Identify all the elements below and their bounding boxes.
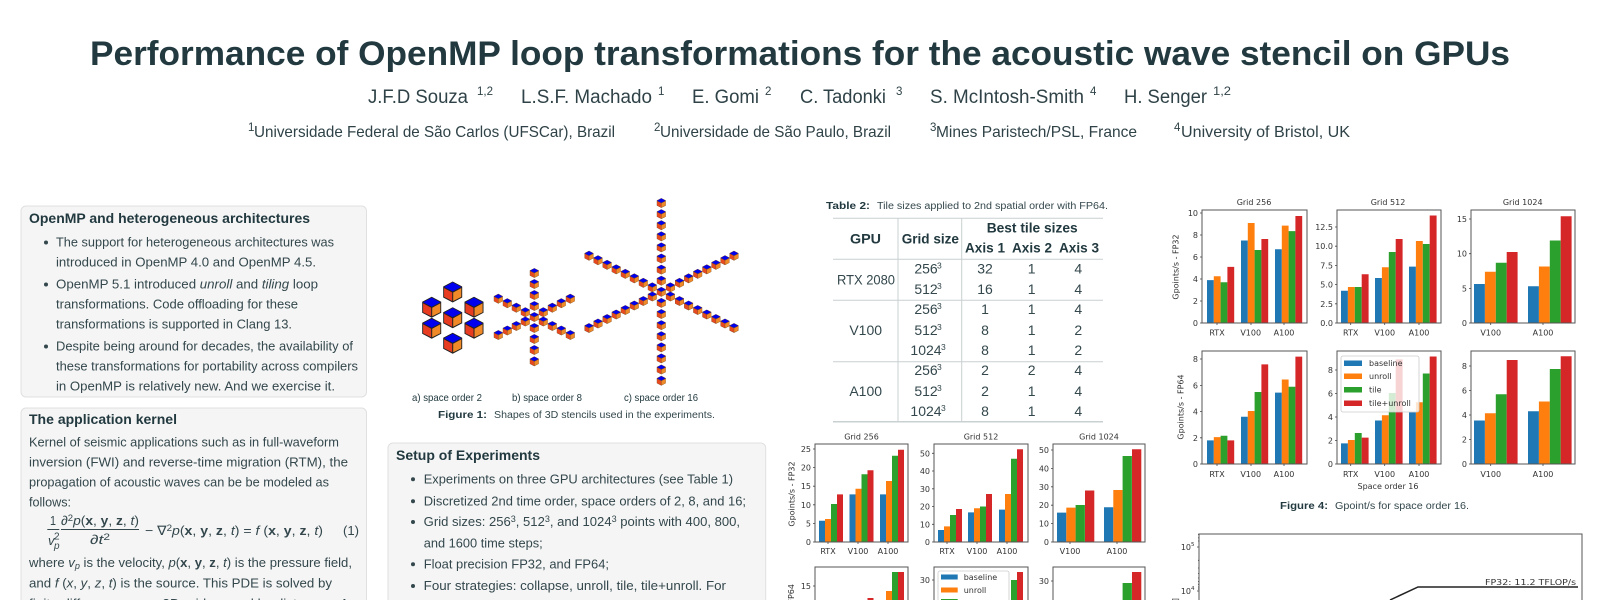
bullet list: Experiments on three GPU architectures (see Table 1) — [424, 471, 733, 486]
kernel explanation text — [28, 555, 352, 600]
bullet list: , and 1024 — [550, 514, 612, 529]
chart: Grid 512 FP64 with legend: 2 — [1328, 436, 1333, 446]
chart: Grid 1024 FP32: 0 — [1462, 319, 1467, 328]
authors: S. McIntosh-Smith — [930, 87, 1084, 108]
chart: Grid 512 FP32: 20 — [920, 502, 930, 512]
chart: Grid 1024 FP32: 5 — [1462, 284, 1467, 293]
table body: 3 — [937, 362, 942, 372]
chart: Grid 256 FP32: A100 — [1274, 329, 1294, 338]
authors: L.S.F. Machado — [521, 87, 652, 108]
table body: 2 — [1074, 322, 1082, 338]
bullet list: Float precision FP32, and FP64; — [424, 556, 609, 571]
table body: 1 — [1028, 403, 1036, 419]
chart: Grid 256 FP32: RTX — [1209, 329, 1225, 338]
table body: 1024 — [910, 342, 942, 358]
chart: Grid 1024 FP64: 2 — [1462, 436, 1467, 444]
chart: Grid 512 FP32: 30 — [920, 485, 930, 494]
chart: Grid 512 FP64 with legend: Space order 16 — [1358, 482, 1418, 491]
affiliations: Universidade Federal de São Carlos (UFSCar), Brazil — [254, 124, 615, 141]
bullet text: introduced in OpenMP 4.0 and OpenMP 4.5. — [56, 255, 316, 270]
table body: 3 — [937, 322, 942, 332]
table 2: tile sizes — [826, 201, 1108, 422]
table body: 3 — [937, 281, 942, 291]
equation: p — [171, 523, 180, 538]
equation: (1) — [343, 523, 359, 538]
chart: Grid 256 FP64: 15 — [801, 582, 811, 591]
chart: Grid 512 FP32: RTX — [1343, 329, 1359, 338]
chart: Grid 256 FP32 — [788, 433, 908, 556]
authors: E. Gomi — [692, 87, 759, 108]
table body: 1 — [981, 301, 989, 317]
chart: Grid 256 FP64: V100 — [1240, 470, 1261, 479]
bullet text: OpenMP 5.1 introduced unroll and tiling loop — [56, 277, 318, 292]
chart: Grid 512 FP32: V100 — [1374, 329, 1395, 338]
chart: Grid 1024 FP64 — [1462, 351, 1575, 479]
chart: Grid 256 FP64 — [787, 567, 908, 600]
chart: Grid 256 FP64: RTX — [1209, 470, 1225, 479]
table body: 256 — [914, 260, 938, 276]
chart: Grid 256 FP32: 5 — [806, 519, 811, 528]
authors: 1,2 — [477, 86, 493, 98]
chart: Grid 256 FP64 — [1176, 351, 1307, 479]
chart: log-scale FLOP performance: 5 — [1191, 542, 1195, 548]
table body: 16 — [977, 281, 993, 297]
affiliations: 1 — [248, 122, 254, 134]
chart: log-scale FLOP performance: 4 — [1191, 586, 1195, 592]
chart: Grid 512 FP64 with legend: 30 — [920, 576, 930, 585]
legend: unroll — [964, 586, 986, 595]
chart: Grid 256 FP32: V100 — [848, 547, 868, 556]
equation: 2 — [68, 513, 73, 523]
chart: Grid 512 FP32: 7.5 — [1320, 261, 1333, 270]
bullet text: these transformations for portability across compilers — [56, 359, 358, 374]
table body: 512 — [914, 281, 938, 297]
table body: 4 — [1074, 383, 1082, 399]
chart: Grid 512 FP64 with legend: 4 — [1328, 413, 1333, 422]
chart: Grid 512 FP32: 12.5 — [1315, 223, 1333, 232]
table body: 2 — [1028, 362, 1036, 378]
table body: 256 — [914, 301, 938, 317]
chart: Grid 1024 FP32: V100 — [1060, 547, 1080, 556]
chart: Grid 256 FP32: Grid 256 — [1237, 198, 1271, 207]
panel: OpenMP and heterogeneous architectures — [21, 206, 366, 397]
legend: unroll — [1369, 372, 1392, 381]
chart: Grid 1024 FP64: V100 — [1480, 470, 1501, 479]
table body: 3 — [941, 342, 946, 352]
chart: Grid 512 FP64 with legend — [920, 567, 1028, 600]
chart: Grid 1024 FP32: 0 — [1044, 538, 1049, 547]
kernel explanation text: p — [74, 561, 80, 571]
bullet list: Four strategies: collapse, unroll, tile, tile+unroll. For — [424, 578, 727, 593]
kernel explanation text: where v — [29, 555, 75, 570]
chart: Grid 1024 FP64: 30 — [1039, 577, 1049, 586]
figure 1: 3D stencils — [412, 198, 738, 421]
chart: Grid 256 FP32: RTX — [820, 547, 836, 556]
chart: log-scale FLOP performance: 10 — [1181, 587, 1191, 596]
affiliations — [248, 122, 1350, 141]
table body: A100 — [849, 383, 882, 399]
bullet list — [411, 471, 746, 600]
chart: Grid 1024 FP32: A100 — [1107, 547, 1127, 556]
figure 1 caption: Shapes of 3D stencils used in the experiments. — [494, 410, 715, 421]
heading: Setup of Experiments — [396, 448, 540, 463]
bullet list: , 512 — [516, 514, 545, 529]
chart: Grid 256 FP32: Grid 256 — [844, 433, 879, 442]
chart: Grid 512 FP32: 5.0 — [1320, 281, 1333, 290]
affiliations: 2 — [654, 122, 660, 134]
chart: Grid 512 FP32: 10.0 — [1315, 242, 1333, 251]
legend — [938, 571, 1009, 600]
affiliations: 3 — [930, 122, 936, 134]
affiliations: University of Bristol, UK — [1181, 124, 1350, 141]
chart: Grid 256 FP32: 2 — [1193, 297, 1198, 306]
chart: Grid 256 FP32: 15 — [801, 482, 811, 491]
table header — [850, 220, 1099, 256]
figure 1 caption: Figure 1: — [438, 410, 487, 421]
chart: log-scale FLOP performance — [1171, 534, 1582, 600]
authors: 1 — [658, 86, 664, 98]
bullet list: Discretized 2nd time order, space orders of 2, 8, and 16; — [424, 493, 746, 508]
table body: 4 — [1074, 260, 1082, 276]
equation: (x, y, z, t) — [81, 513, 139, 528]
chart: Grid 1024 FP32: 20 — [1039, 501, 1049, 510]
equation — [47, 513, 359, 552]
authors: H. Senger — [1124, 87, 1208, 108]
chart: Grid 1024 FP32: Grid 1024 — [1503, 198, 1543, 207]
authors: J.F.D Souza — [368, 87, 468, 108]
chart: Grid 1024 FP32: A100 — [1533, 329, 1553, 338]
table body: 4 — [1074, 362, 1082, 378]
table body: 2 — [1074, 342, 1082, 358]
panel: setup of experiments — [388, 443, 766, 600]
table body: 256 — [914, 362, 938, 378]
chart: Grid 256 FP32: 0 — [806, 538, 811, 547]
chart: Grid 256 FP32: 8 — [1193, 231, 1198, 240]
chart: Grid 512 FP32: Grid 512 — [1371, 198, 1405, 207]
chart: Grid 256 FP32 — [1172, 198, 1307, 338]
affiliations: Mines Paristech/PSL, France — [936, 124, 1137, 141]
panel: the application kernel — [21, 408, 366, 600]
equation: (x, y, z, t) = f (x, y, z, t) — [180, 523, 323, 538]
figure 4: space order 16 bar charts — [1172, 198, 1575, 512]
chart: Grid 256 FP32: Gpoints/s - FP32 — [1172, 234, 1180, 300]
chart: Grid 256 FP64: A100 — [1274, 470, 1294, 479]
chart: Grid 512 FP64 with legend: 0 — [1328, 460, 1333, 469]
legend — [1341, 356, 1419, 412]
table body: 1024 — [910, 403, 942, 419]
stencil: space order 8 — [494, 268, 575, 366]
stencil labels: b) space order 8 — [512, 392, 582, 404]
chart: Grid 1024 FP64 — [1039, 567, 1145, 600]
chart: Grid 512 FP32: 2.5 — [1320, 300, 1333, 309]
table header: Grid size — [902, 230, 959, 246]
bullet list: 3 — [511, 514, 516, 524]
equation: ∂ — [61, 513, 68, 528]
table body: 2 — [981, 362, 989, 378]
authors: 2 — [765, 86, 771, 98]
authors — [368, 86, 1231, 108]
chart: Grid 256 FP32: 10 — [1188, 209, 1198, 218]
chart: Grid 256 FP32: 20 — [801, 464, 811, 473]
table body: 512 — [914, 322, 938, 338]
legend: baseline — [964, 573, 997, 582]
legend: tile+unroll — [1369, 399, 1411, 408]
chart: Grid 512 FP32: 10 — [920, 520, 930, 529]
table body: 8 — [981, 322, 989, 338]
chart: Grid 512 FP32: 50 — [920, 449, 930, 458]
authors: 4 — [1090, 86, 1097, 98]
bullet list: and 1600 time steps; — [424, 535, 543, 550]
stencil labels — [412, 392, 698, 404]
affiliations: 4 — [1174, 122, 1181, 134]
equation: − ∇ — [145, 523, 165, 538]
chart: Grid 256 FP64: 6 — [1193, 381, 1198, 390]
table caption: Tile sizes applied to 2nd spatial order with FP64. — [877, 201, 1108, 212]
chart: Grid 512 FP32: 0 — [925, 538, 930, 547]
bullet text: in OpenMP is relatively new. And we exercise it. — [56, 379, 335, 394]
chart: Grid 256 FP64: 4 — [1193, 408, 1198, 417]
table body: 32 — [977, 260, 993, 276]
bullet text: transformations is supported in Clang 13. — [56, 317, 292, 332]
table body: 4 — [1074, 281, 1082, 297]
table body: 1 — [1028, 383, 1036, 399]
chart: Grid 1024 FP32: 10 — [1457, 250, 1467, 259]
chart: Grid 256 FP64: Gpoints/s - FP64 — [1176, 374, 1186, 440]
equation: 1 — [50, 513, 56, 528]
table body: 512 — [914, 383, 938, 399]
table body: 2 — [981, 383, 989, 399]
chart: Grid 256 FP32: 10 — [801, 501, 811, 510]
kernel explanation text: is the velocity, — [80, 555, 168, 570]
chart: Grid 1024 FP32: 50 — [1039, 446, 1049, 455]
title: Performance of OpenMP loop transformations for the acoustic wave stencil on GPUs — [90, 35, 1510, 73]
chart: Grid 512 FP32: A100 — [997, 547, 1017, 556]
chart: Grid 256 FP32: 25 — [801, 445, 811, 454]
chart: Grid 512 FP64 with legend: 8 — [1328, 366, 1333, 375]
bullet text: The support for heterogeneous architectures was — [56, 235, 334, 250]
table header: GPU — [850, 230, 881, 246]
equation: 2 — [54, 532, 60, 542]
chart: Grid 256 FP32: Gpoints/s - FP32 — [788, 461, 796, 527]
chart: Grid 512 FP32: Grid 512 — [964, 433, 998, 442]
stencil labels: c) space order 16 — [624, 392, 698, 404]
equation: v — [48, 533, 56, 548]
chart: Grid 512 FP32: 40 — [920, 467, 930, 476]
affiliations: Universidade de São Paulo, Brazil — [660, 124, 891, 141]
chart: Grid 512 FP32: A100 — [1409, 329, 1429, 338]
table body: 8 — [981, 403, 989, 419]
chart: Grid 1024 FP32: 30 — [1039, 483, 1049, 492]
chart: Grid 256 FP32: 4 — [1193, 275, 1198, 284]
kernel explanation text: and f (x, y, z, t) is the source. This PDE is solved by — [29, 576, 332, 591]
chart: Grid 512 FP32 — [920, 433, 1028, 556]
table caption: Table 2: — [826, 201, 870, 212]
kernel intro text: inversion (FWI) and reverse-time migration (RTM), the — [29, 455, 348, 470]
table header: Axis 2 — [1012, 240, 1052, 256]
table body — [837, 260, 1082, 419]
authors: 3 — [896, 86, 902, 98]
chart: Grid 1024 FP64: 4 — [1462, 411, 1467, 420]
chart: Grid 1024 FP32: V100 — [1480, 329, 1501, 338]
bullet text: Despite being around for decades, the availability of — [56, 339, 353, 354]
figure 4 caption — [1280, 501, 1469, 512]
bullet list: 3 — [612, 514, 617, 524]
chart: Grid 512 FP64 with legend: V100 — [1374, 470, 1395, 479]
table body: 1 — [1028, 301, 1036, 317]
figure: space order 8 bar charts — [787, 433, 1145, 600]
table body: RTX 2080 — [837, 271, 895, 287]
table header: Best tile sizes — [987, 220, 1078, 236]
chart: Grid 256 FP64: 8 — [1193, 355, 1198, 364]
chart: Grid 1024 FP64: A100 — [1533, 470, 1553, 479]
stencil: space order 2 — [422, 282, 484, 354]
chart: Grid 1024 FP32 — [1039, 433, 1145, 556]
table body: 1 — [1028, 281, 1036, 297]
authors: C. Tadonki — [800, 87, 886, 108]
chart: Grid 256 FP64: 2 — [1193, 434, 1198, 443]
chart: Grid 1024 FP32: 10 — [1039, 520, 1049, 529]
bullet list: points with 400, 800, — [617, 514, 740, 529]
equation: p — [72, 513, 81, 528]
chart: Grid 1024 FP32: 40 — [1039, 464, 1049, 473]
equation: p — [53, 541, 60, 552]
authors: 1,2 — [1213, 86, 1231, 98]
kernel intro text: follows: — [29, 495, 71, 510]
chart: Grid 512 FP64 with legend: RTX — [1343, 470, 1359, 479]
chart: Grid 512 FP64 with legend: 6 — [1328, 390, 1333, 398]
equation: ∂t — [90, 532, 102, 547]
table body: 1 — [1028, 260, 1036, 276]
stencil labels: a) space order 2 — [412, 392, 482, 404]
chart: Grid 256 FP32: 0 — [1193, 319, 1198, 328]
table header: Axis 3 — [1059, 240, 1099, 256]
chart: Grid 512 FP32: RTX — [939, 547, 955, 556]
table header: Axis 1 — [965, 240, 1005, 256]
heading: The application kernel — [29, 412, 177, 427]
chart: Grid 1024 FP64: 0 — [1462, 460, 1467, 469]
figure 4 caption: Gpoint/s for space order 16. — [1335, 501, 1469, 512]
table body: 3 — [937, 260, 942, 270]
equation: 2 — [167, 523, 172, 533]
chart: Grid 512 FP64 with legend: A100 — [1409, 470, 1429, 479]
table body: 1 — [1028, 322, 1036, 338]
table body: 4 — [1074, 403, 1082, 419]
kernel intro text: Kernel of seismic applications such as in full-waveform — [29, 435, 339, 450]
chart: log-scale FLOP performance: FP32: 11.2 TFLOP/s — [1485, 578, 1576, 587]
table body: 3 — [937, 383, 942, 393]
chart: Grid 1024 FP64: 8 — [1462, 362, 1467, 371]
bullet list: Grid sizes: 256 — [424, 514, 510, 529]
kernel explanation text: p(x, y, z, t) is the pressure field, — [168, 555, 351, 570]
bullet list: 3 — [545, 514, 550, 524]
chart: Grid 1024 FP32 — [1457, 198, 1575, 338]
equation: 2 — [103, 532, 110, 542]
chart: Grid 256 FP32: A100 — [878, 547, 898, 556]
kernel intro text — [29, 435, 348, 510]
legend: baseline — [1369, 359, 1403, 368]
table body: 1 — [1028, 342, 1036, 358]
chart: log-scale FLOP performance: 10 — [1181, 543, 1191, 552]
chart: Grid 512 FP64 with legend — [1328, 351, 1441, 491]
stencil: space order 16 — [584, 198, 738, 386]
chart: Grid 512 FP32: V100 — [967, 547, 987, 556]
chart: Grid 1024 FP32: 15 — [1457, 215, 1467, 224]
chart: Grid 1024 FP64: 6 — [1462, 386, 1467, 396]
kernel intro text: propagation of acoustic waves can be be modeled as — [29, 475, 329, 490]
table body: 3 — [941, 403, 946, 413]
table body: 8 — [981, 342, 989, 358]
chart: Grid 1024 FP32: Grid 1024 — [1079, 433, 1119, 442]
chart: Grid 512 FP32 — [1315, 198, 1441, 338]
chart: Grid 256 FP32: 6 — [1193, 253, 1198, 262]
table body: 4 — [1074, 301, 1082, 317]
table body: V100 — [849, 322, 882, 338]
chart: Grid 256 FP64: 0 — [1193, 460, 1198, 469]
bullet text: transformations. Code offloading for these — [56, 297, 298, 312]
chart: Grid 256 FP32: V100 — [1240, 329, 1261, 338]
legend: tile — [1369, 386, 1382, 394]
figure 4 caption: Figure 4: — [1280, 501, 1328, 512]
bullet text — [44, 235, 358, 394]
heading: OpenMP and heterogeneous architectures — [29, 211, 310, 226]
chart: Grid 512 FP32: 0.0 — [1320, 319, 1333, 328]
table body: 3 — [937, 301, 942, 311]
